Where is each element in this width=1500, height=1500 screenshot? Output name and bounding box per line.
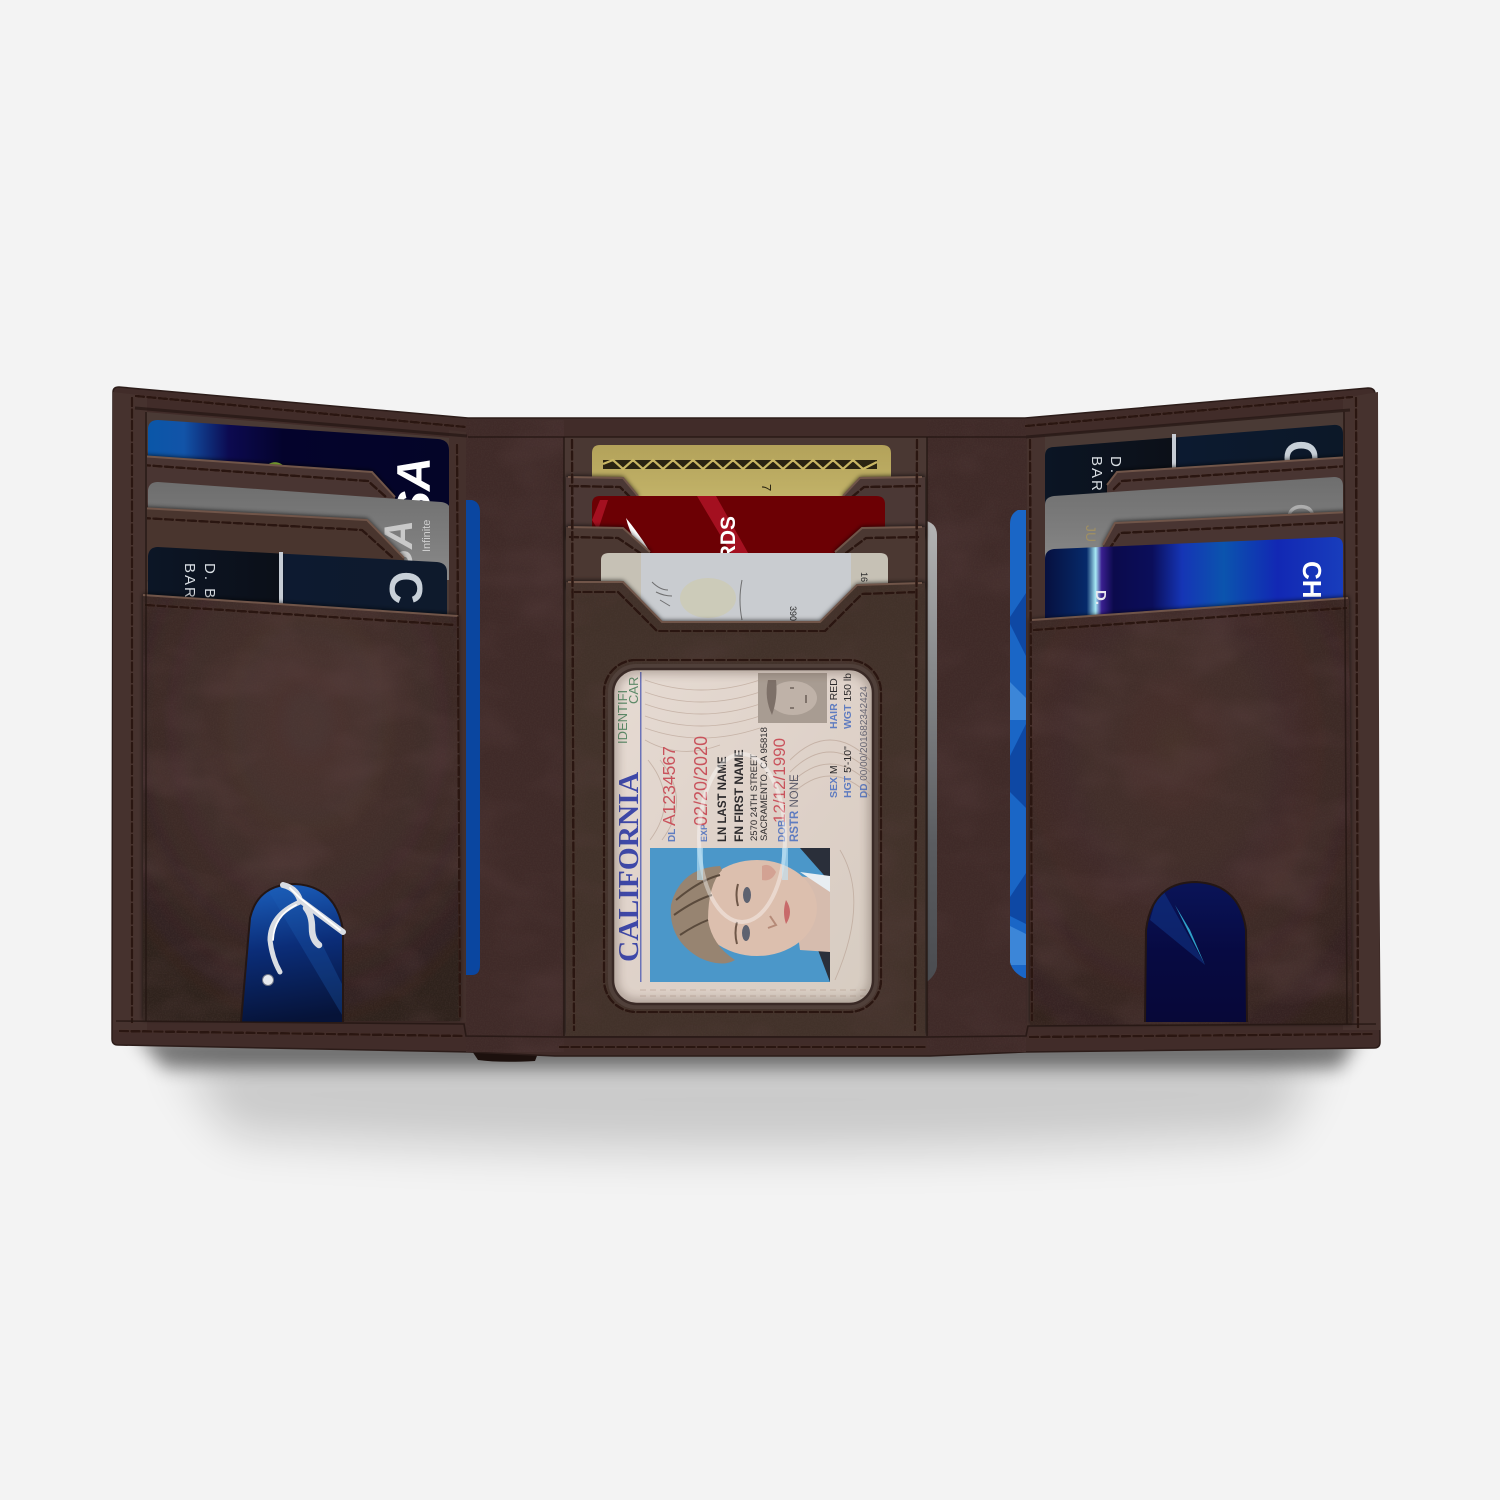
pocket slot centre 1	[566, 477, 925, 540]
card: dark navy top: C	[1275, 440, 1327, 473]
centre panel base	[564, 437, 927, 1036]
driver licence: DD 00/00/201682342424	[859, 686, 870, 798]
driver licence: A1234567	[659, 746, 679, 826]
main portrait photo	[650, 848, 830, 982]
front pocket left	[143, 590, 463, 1025]
card: navy Visa	[148, 420, 449, 567]
window vignette	[613, 669, 873, 1004]
thumb cut-out with antler logo	[240, 882, 346, 1022]
driver licence: 02/20/2020	[691, 736, 711, 826]
icon: antler	[262, 885, 343, 986]
right panel stitching	[1026, 397, 1358, 1028]
pocket slot 1	[138, 456, 395, 530]
driver licence: EXP	[699, 824, 709, 842]
driver licence	[610, 665, 880, 1010]
card: grey right: JU	[1083, 525, 1099, 542]
spine top band crease	[468, 436, 1026, 438]
right spine	[927, 420, 1026, 1052]
side strips right panel	[1027, 392, 1380, 1030]
spine bottom tab	[470, 1048, 540, 1062]
front pocket centre	[566, 580, 926, 1038]
pocket slot right 2	[1103, 512, 1352, 570]
card: gold	[592, 445, 891, 520]
panel: right	[1026, 392, 1380, 1030]
blue card edge left	[464, 500, 480, 975]
driver licence: HGT 5'-10"	[842, 746, 854, 798]
card: grey Visa Infinite: VISA	[377, 520, 421, 613]
card: blue right: D.	[1092, 590, 1109, 605]
card: grey Visa Infinite	[148, 482, 451, 613]
card: ID back: 390	[788, 606, 798, 621]
bottom binding	[116, 1021, 1376, 1047]
pocket slot centre 2	[566, 527, 925, 590]
card: grey Visa Infinite: Infinite	[421, 520, 433, 552]
centre panel stitching	[564, 437, 927, 1036]
driver licence: IDENTIFI	[615, 690, 630, 744]
card: dark navy top: BAR	[1088, 456, 1105, 493]
card: ID back	[601, 553, 888, 630]
driver licence: LN LAST NAME	[717, 756, 729, 842]
side strip right	[449, 430, 466, 1022]
left panel stitching	[132, 396, 467, 1022]
pocket slot 2	[138, 508, 404, 580]
wallet drop shadow	[135, 1035, 1360, 1150]
driver licence: SEX M	[828, 765, 840, 798]
card: dark navy: D. B	[201, 563, 218, 600]
card: dark navy	[148, 547, 447, 630]
front pocket right	[1030, 595, 1354, 1027]
card: dark navy: C	[380, 571, 432, 604]
card: ID back: 16	[859, 572, 869, 582]
card: gold: 7	[759, 484, 774, 491]
left spine	[466, 420, 564, 1052]
pocket slot right 1	[1107, 457, 1352, 520]
driver licence: RSTR NONE	[789, 774, 801, 842]
driver licence: WGT 150 lb	[842, 673, 854, 729]
wallet	[112, 387, 1380, 1062]
small ghost portrait	[758, 673, 827, 723]
card: blue right	[1045, 537, 1343, 640]
panel: centre	[564, 437, 927, 1038]
card: dark navy: BAR	[181, 563, 198, 600]
card: navy Visa: VISA	[387, 457, 440, 567]
window stitching	[604, 660, 881, 1012]
card: red rewards: RDS	[717, 516, 740, 560]
card slot background right	[1042, 410, 1346, 625]
grey card edge centre	[922, 520, 937, 984]
licence heading: CALIFORNIA	[614, 771, 645, 962]
window rim	[608, 664, 878, 1009]
driver licence: DOB	[777, 820, 788, 842]
driver licence: 12/12/1990	[770, 738, 789, 823]
licence guilloche	[640, 680, 870, 996]
card slot background	[146, 412, 452, 620]
card: blue right: CH	[1297, 561, 1327, 599]
blue card edge right	[1010, 510, 1026, 978]
driver licence: CAR	[626, 677, 641, 704]
thumb cut-out right	[1140, 880, 1250, 1025]
driver licence: 2570 24TH STREET	[749, 754, 760, 841]
card: dark navy top	[1045, 425, 1343, 510]
wallet leather base	[112, 387, 1380, 1056]
card: dark navy top: D. B	[1107, 456, 1124, 493]
side strip left	[113, 392, 147, 1030]
card: grey right: C	[1279, 503, 1321, 530]
panel: left	[113, 392, 467, 1030]
hologram bars	[700, 848, 785, 880]
licence fields: DL	[667, 829, 678, 842]
driver licence: FN FIRST NAME	[732, 749, 746, 842]
hologram ring	[699, 754, 785, 922]
card: red rewards	[592, 496, 885, 570]
ID window	[604, 660, 881, 1012]
card: grey right	[1045, 477, 1343, 570]
driver licence: HAIR RED	[828, 678, 840, 729]
driver licence: SACRAMENTO, CA 95818	[759, 727, 770, 841]
